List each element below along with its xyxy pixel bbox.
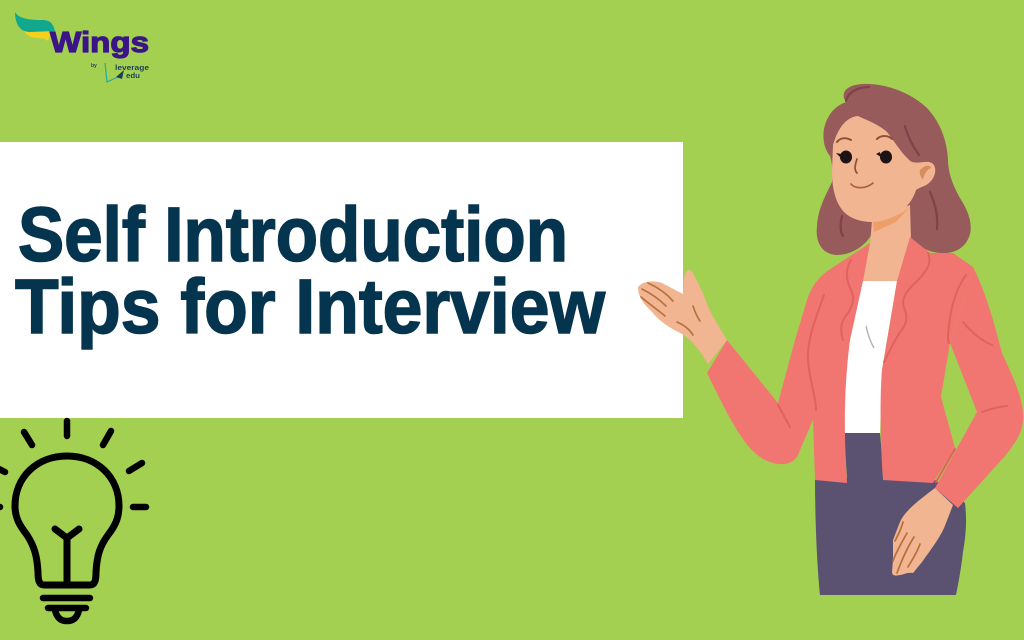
blazer fold lines — [778, 253, 1007, 482]
logo byline: leverage — [115, 63, 149, 72]
blazer right sleeve — [935, 267, 1023, 508]
neck shadow — [873, 207, 910, 232]
lower hand creases — [893, 522, 920, 573]
bulb base — [43, 598, 90, 621]
blazer — [707, 237, 1023, 508]
hand creases — [641, 283, 700, 335]
hair strands — [841, 87, 937, 236]
logo byline: edu — [126, 71, 140, 80]
face — [832, 116, 935, 222]
hair back — [817, 84, 971, 255]
ear detail — [920, 166, 931, 180]
icon: logo wave — [15, 12, 55, 41]
panel: title banner — [0, 142, 683, 418]
blazer left front and sleeve — [707, 243, 870, 483]
title: Tips for Interview — [15, 264, 606, 350]
icon: light bulb — [0, 421, 146, 621]
hand lower — [892, 488, 953, 576]
logo wordmark: Wings — [50, 27, 149, 59]
title — [15, 192, 606, 350]
logo byline — [91, 63, 149, 82]
neck — [861, 205, 911, 284]
title: Self Introduction — [18, 192, 568, 278]
eyebrows and nose and mouth — [837, 136, 892, 188]
eyes — [836, 150, 892, 164]
logo byline: by — [91, 63, 97, 69]
white blouse — [840, 281, 897, 435]
skirt — [815, 433, 966, 595]
illustration: woman presenting — [638, 84, 1023, 595]
bulb rays — [0, 421, 146, 507]
bulb filament — [55, 529, 79, 585]
blazer right front — [881, 237, 973, 483]
bulb glass — [15, 456, 119, 585]
hand raised — [638, 270, 727, 364]
blouse fold — [866, 326, 874, 348]
logo: Wings by leverage edu — [15, 12, 149, 82]
